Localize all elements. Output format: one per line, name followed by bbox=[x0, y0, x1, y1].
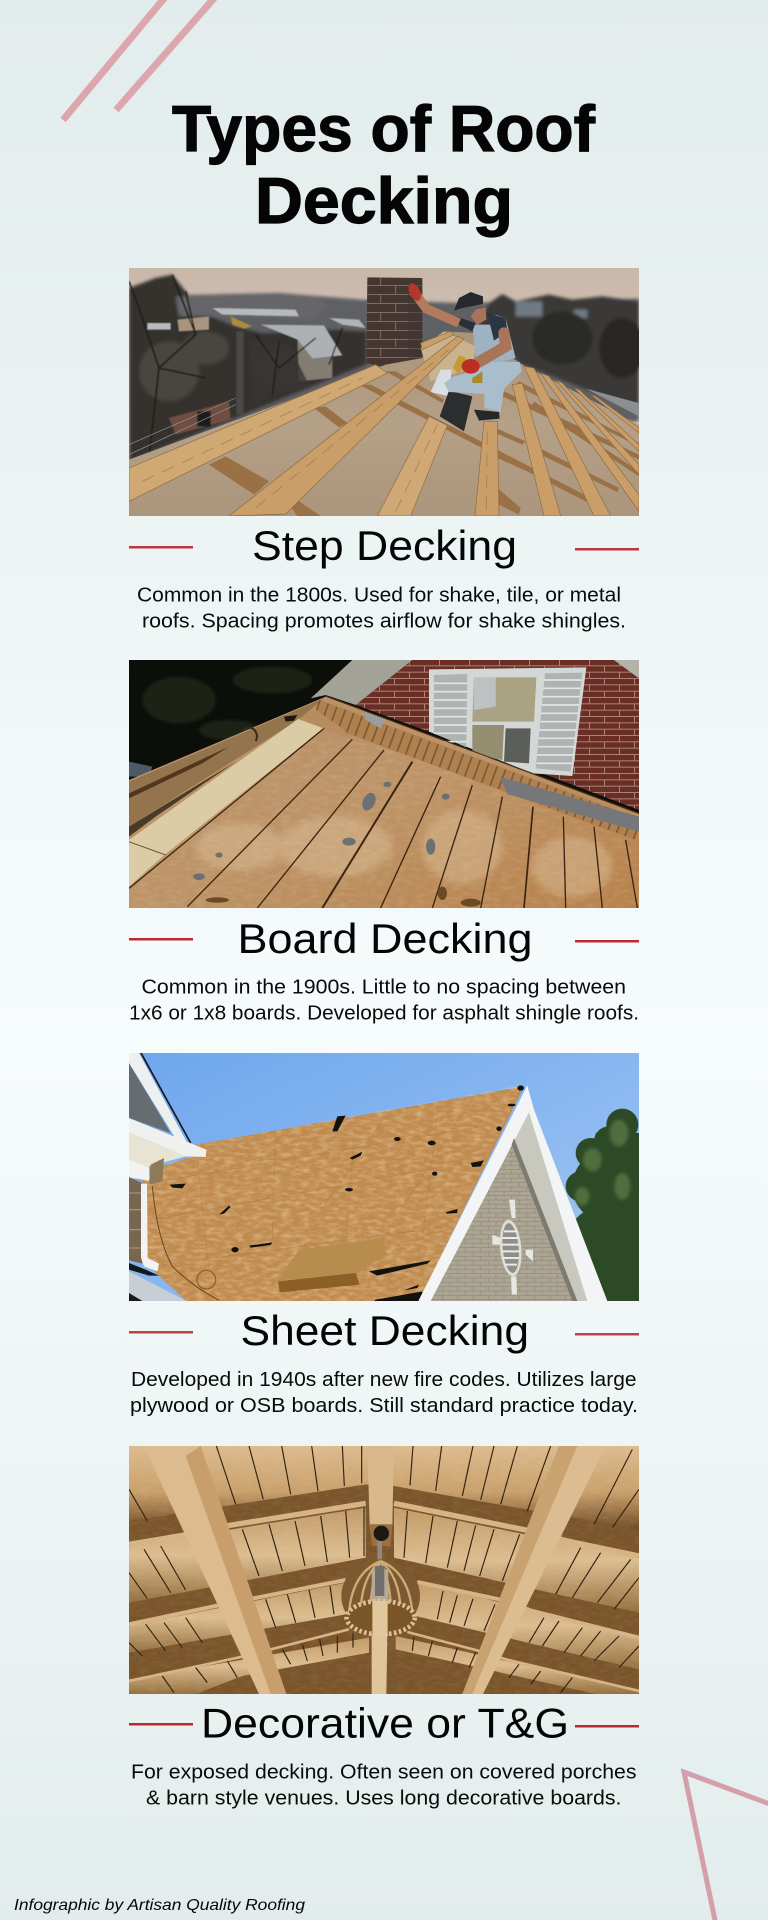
rule left: decorative bbox=[129, 1723, 193, 1726]
title bbox=[172, 92, 595, 237]
text: step decking description: roofs. Spacing promotes airflow for shake shingles. bbox=[142, 610, 626, 632]
worker bbox=[444, 361, 522, 412]
title: Decking bbox=[255, 164, 513, 237]
black felt scraps bbox=[170, 1085, 524, 1301]
text: sheet decking description bbox=[130, 1369, 638, 1417]
title: Types of Roof bbox=[172, 92, 595, 165]
rafters lit edges bbox=[129, 1503, 639, 1691]
vent bbox=[492, 1200, 533, 1295]
left gable bbox=[129, 1063, 171, 1133]
heading: board decking: Board Decking bbox=[238, 915, 532, 962]
rule left: board decking bbox=[129, 938, 193, 940]
brick gable bbox=[431, 1138, 576, 1301]
battens bbox=[209, 371, 639, 516]
photo: sheet decking house bbox=[129, 1053, 639, 1301]
OSB roof bbox=[142, 1086, 524, 1301]
text: board decking description: 1x6 or 1x8 boards. Developed for asphalt shingle roofs. bbox=[129, 1002, 639, 1024]
heading: sheet decking: Sheet Decking bbox=[240, 1307, 529, 1354]
rule right: board decking bbox=[575, 940, 639, 942]
panel: decorative or T&G decking bbox=[129, 1446, 639, 1810]
rule left: sheet decking bbox=[129, 1331, 193, 1334]
roof surface bbox=[129, 331, 639, 516]
text: decorative description: For exposed decking. Often seen on covered porches bbox=[131, 1762, 636, 1784]
rule left: step decking bbox=[129, 546, 193, 548]
photo: exposed wood ceiling with pendant lamp bbox=[129, 1446, 639, 1694]
text: decorative description: & barn style venues. Uses long decorative boards. bbox=[146, 1788, 622, 1810]
decoration: top-left diagonal lines bbox=[63, 0, 216, 120]
text: board decking description: Common in the 1900s. Little to no spacing between bbox=[142, 976, 626, 998]
left beam bbox=[144, 1446, 286, 1694]
rule right: sheet decking bbox=[575, 1333, 639, 1336]
panel: sheet decking bbox=[129, 1053, 662, 1417]
cornice and downspout bbox=[129, 1133, 186, 1181]
roof bbox=[129, 697, 639, 908]
chimney bbox=[366, 277, 422, 373]
heading: decorative or T&G: Decorative or T&G bbox=[201, 1700, 569, 1746]
lamp bbox=[341, 1526, 420, 1636]
tree bbox=[562, 1109, 662, 1303]
panel: board decking bbox=[129, 660, 639, 1024]
center post bbox=[367, 1446, 394, 1524]
text: sheet decking description: Developed in 1940s after new fire codes. Utilizes large bbox=[131, 1369, 636, 1391]
knots bbox=[193, 782, 450, 880]
board seams bbox=[129, 728, 637, 908]
text: decorative description bbox=[131, 1762, 636, 1810]
panel: step decking bbox=[129, 268, 646, 632]
flashing bbox=[500, 777, 639, 832]
photo: step decking roof with worker bbox=[129, 268, 639, 516]
plank seams bbox=[129, 1446, 639, 1693]
text: step decking description bbox=[137, 584, 626, 632]
plank rows bbox=[129, 1446, 639, 1529]
footer credit: Infographic by Artisan Quality Roofing bbox=[14, 1897, 305, 1914]
photo: board decking roof bbox=[129, 660, 639, 908]
heading: step decking: Step Decking bbox=[252, 522, 517, 569]
decoration: bottom-right triangle outline bbox=[684, 1772, 768, 1920]
rule right: decorative bbox=[575, 1725, 639, 1728]
right beam bbox=[462, 1446, 606, 1694]
patch bbox=[279, 1238, 386, 1280]
rafter tails bbox=[316, 710, 639, 830]
rule right: step decking bbox=[575, 548, 639, 550]
text: sheet decking description: plywood or OSB boards. Still standard practice today. bbox=[130, 1395, 638, 1417]
boards bbox=[129, 331, 639, 516]
text: step decking description: Common in the 1800s. Used for shake, tile, or metal bbox=[137, 584, 621, 606]
metal flashing bbox=[431, 370, 452, 396]
text: board decking description bbox=[129, 976, 639, 1024]
